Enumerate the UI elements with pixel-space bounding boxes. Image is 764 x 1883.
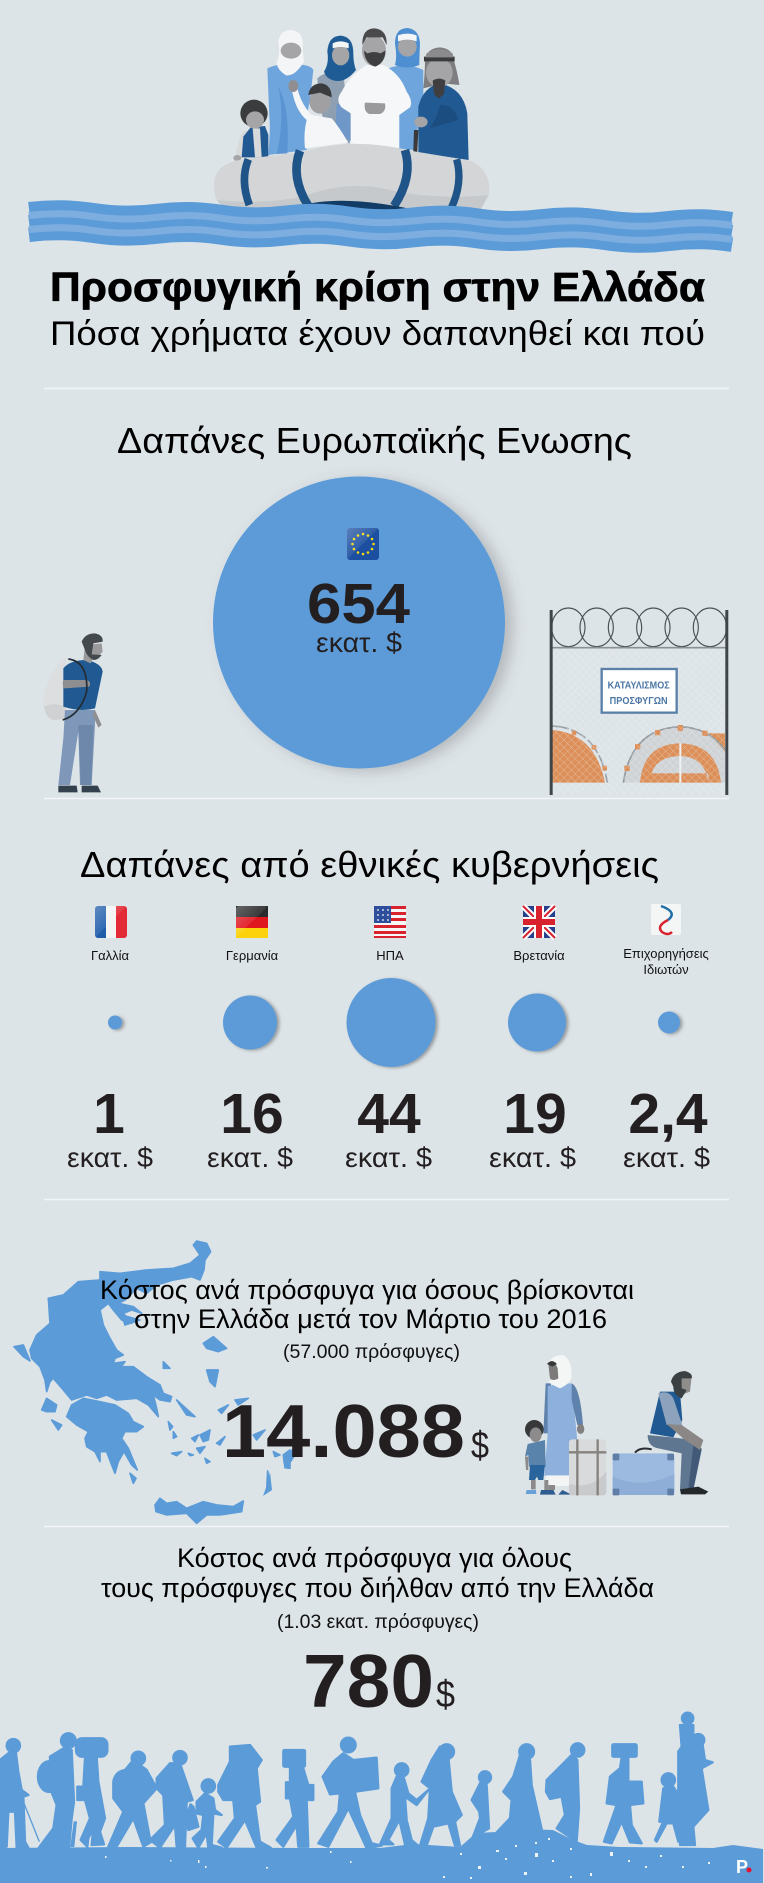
- figure: woman in dark blue hijab: [317, 36, 356, 143]
- label: Germany: Γερμανία: [226, 948, 279, 963]
- text: cost per refugee since March 2016: [100, 1275, 634, 1334]
- unit: Germany: εκατ. $: [207, 1142, 293, 1173]
- silhouettes: walking refugees, right: [380, 1713, 713, 1846]
- figure: woman in white hijab: [267, 30, 313, 155]
- value: Britain: 19: [503, 1082, 567, 1146]
- speckles: [105, 1838, 710, 1879]
- logo: P: [736, 1857, 748, 1877]
- figure: old man with keffiyeh: [413, 47, 469, 160]
- boat hull: [214, 144, 489, 212]
- Rhodes and Karpathos: [263, 1440, 298, 1496]
- map of Greece: [14, 1241, 290, 1523]
- flag: Germany: [236, 906, 268, 938]
- flag: France: [95, 906, 127, 938]
- text: cost per refugee for all who passed through: [101, 1543, 654, 1603]
- figure: man in white robe: [338, 28, 411, 148]
- waves: [29, 207, 732, 246]
- icon: EU flag: [347, 528, 379, 560]
- label: USA: ΗΠΑ: [376, 948, 404, 963]
- figure: woman: [540, 1355, 584, 1495]
- title: Προσφυγική κρίση στην Ελλάδα: [50, 264, 705, 310]
- chain link mesh: [552, 648, 727, 795]
- heading: EU spending: Δαπάνες Ευρωπαϊκής Ενωσης: [117, 420, 632, 461]
- label: France: Γαλλία: [91, 948, 130, 963]
- value: 654: 654: [307, 572, 410, 636]
- value: 14.088: 14.088: [222, 1389, 465, 1473]
- icon: private donations: [651, 904, 681, 935]
- unit: USA: εκατ. $: [345, 1142, 432, 1173]
- bubble: France: [108, 1016, 122, 1030]
- heading: national governments: Δαπάνες από εθνικές κυβερνήσεις: [80, 844, 659, 885]
- text: cost per refugee since March 2016: Κόστος ανά πρόσφυγα για όσους βρίσκονται: [100, 1275, 634, 1305]
- flag: USA: [374, 906, 406, 938]
- unit: Britain: εκατ. $: [489, 1142, 576, 1173]
- flag: UK: [523, 906, 555, 938]
- note: 1.03 million refugees: (1.03 εκατ. πρόσφυγες): [277, 1612, 479, 1633]
- unit: France: εκατ. $: [67, 1142, 153, 1173]
- illustration: mother, child and seated man with suitcases: [525, 1355, 708, 1495]
- silhouettes: walking refugees, left: [0, 1733, 382, 1848]
- dollar sign: $: [471, 1425, 489, 1467]
- EU bubble: [213, 476, 505, 768]
- camp sign: ΚΑΤΑΥΛΙΣΜΟΣ: [608, 680, 670, 691]
- ground: [0, 1829, 763, 1883]
- label: private donations: Ιδιωτών: [643, 962, 689, 977]
- unit: εκατ. $: [316, 627, 402, 658]
- camp sign: ΠΡΟΣΦΥΓΩΝ: [610, 696, 668, 707]
- figure: man with sack: [43, 633, 103, 792]
- subtitle: Πόσα χρήματα έχουν δαπανηθεί και πού: [50, 315, 705, 353]
- illustration: refugee camp fence: [550, 608, 728, 795]
- figure: child: [525, 1420, 548, 1494]
- value: Germany: 16: [220, 1082, 284, 1146]
- blue suitcase: [613, 1449, 674, 1495]
- dollar sign: $: [436, 1674, 455, 1716]
- tents: [552, 725, 725, 783]
- fence posts: [550, 610, 728, 795]
- value: 780: 780: [303, 1639, 434, 1723]
- illustration: refugees on a dinghy: [214, 28, 489, 212]
- label: private donations: Επιχορηγήσεις: [623, 946, 709, 961]
- unit: private donations: εκατ. $: [623, 1142, 710, 1173]
- figure: woman in light blue hijab: [388, 28, 423, 150]
- bubble: Britain: [508, 994, 566, 1052]
- bubble: private donations: [658, 1012, 680, 1034]
- bubble: Germany: [223, 996, 277, 1050]
- text: cost per refugee for all who passed through: τους πρόσφυγες που διήλθαν από την Ελλάδα: [101, 1573, 654, 1603]
- figure: small child with curly hair: [233, 100, 268, 161]
- label: private donations: [623, 946, 709, 977]
- value: USA: 44: [357, 1082, 421, 1146]
- note: 57,000 refugees: (57.000 πρόσφυγες): [283, 1342, 460, 1363]
- bubble: USA: [346, 978, 436, 1067]
- barbed wire: [551, 608, 728, 648]
- text: cost per refugee since March 2016: στην Ελλάδα μετά τον Μάρτιο του 2016: [134, 1304, 607, 1334]
- label: Britain: Βρετανία: [513, 948, 565, 963]
- white suitcase: [569, 1439, 606, 1495]
- camp sign: [602, 669, 677, 713]
- value: France: 1: [93, 1082, 125, 1146]
- figure: seated man: [648, 1371, 708, 1494]
- figure: boy waving: [288, 80, 348, 148]
- text: cost per refugee for all who passed through: Κόστος ανά πρόσφυγα για όλους: [177, 1543, 572, 1573]
- value: private donations: 2,4: [628, 1082, 708, 1146]
